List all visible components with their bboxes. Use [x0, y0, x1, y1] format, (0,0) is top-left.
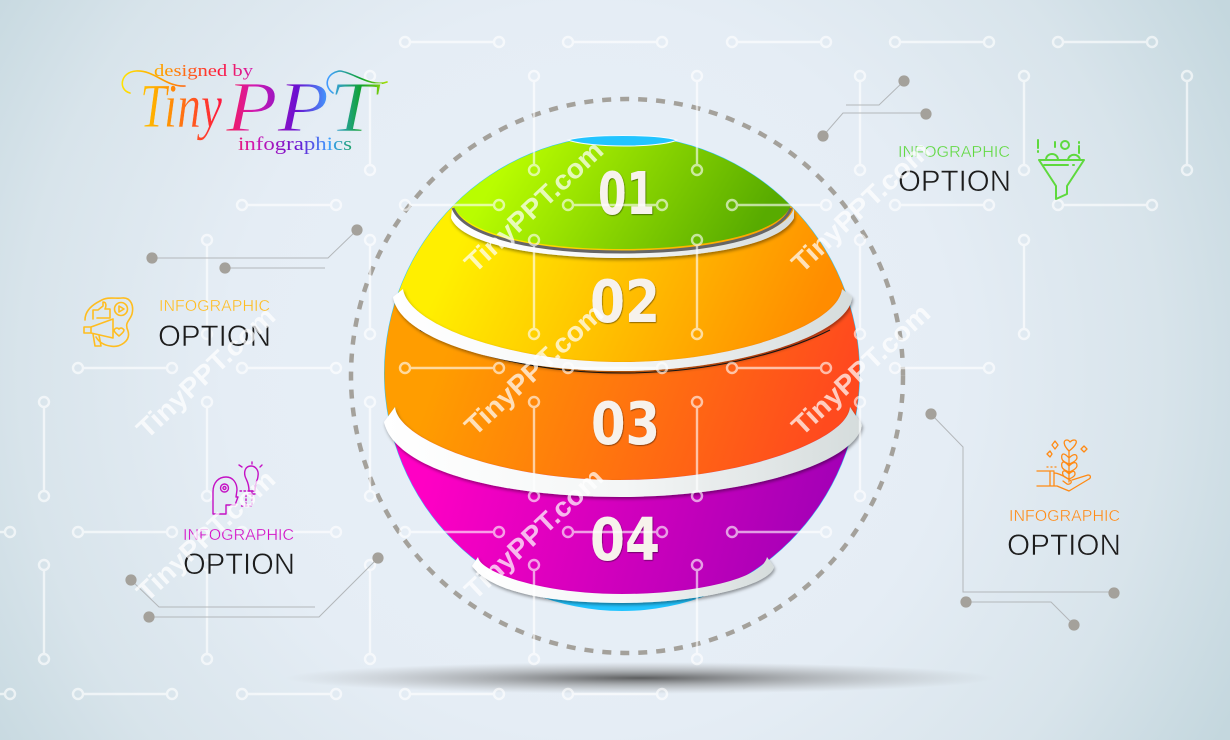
- watermarks: [131, 135, 936, 607]
- segment 03 orange band: [380, 280, 866, 480]
- icon: megaphone: [84, 298, 133, 346]
- number 03: 03: [591, 389, 660, 458]
- sphere cyan core: [384, 135, 860, 611]
- heading: INFOGRAPHIC: INFOGRAPHIC: [898, 144, 1010, 161]
- watermarks: TinyPPT.com: [459, 298, 609, 441]
- heading: INFOGRAPHIC: INFOGRAPHIC: [183, 527, 294, 544]
- ring under segment 03: [384, 407, 862, 497]
- logo PPT: PPT: [225, 67, 382, 147]
- number 01: 01: [598, 159, 655, 228]
- ring under segment 01: [451, 208, 794, 258]
- heading: OPTION: OPTION: [898, 165, 1011, 198]
- trace top left: [146, 224, 363, 274]
- gray circuit traces: [125, 75, 1120, 631]
- watermarks: TinyPPT.com: [459, 462, 609, 605]
- dark edge under ring 02: [420, 330, 830, 373]
- number 04: 04: [590, 505, 660, 574]
- heading: INFOGRAPHIC: INFOGRAPHIC: [1009, 508, 1120, 525]
- sphere: [380, 135, 866, 611]
- trace top right: [817, 75, 932, 142]
- logo: [122, 61, 387, 155]
- sphere ground shadow: [285, 662, 995, 694]
- dark edge under segment 01: [453, 208, 791, 252]
- icon: funnel: [1038, 140, 1084, 199]
- logo designed by: designed by: [154, 61, 254, 80]
- watermarks: TinyPPT.com: [786, 135, 936, 278]
- top cyan cap: [568, 136, 677, 146]
- segment 04 purple band: [380, 420, 866, 599]
- heading: OPTION: OPTION: [1007, 529, 1121, 562]
- watermarks: TinyPPT.com: [786, 298, 936, 441]
- number 02: 02: [590, 267, 660, 336]
- heading: INFOGRAPHIC: INFOGRAPHIC: [159, 298, 270, 315]
- logo swashes: [122, 71, 387, 93]
- heading: OPTION: OPTION: [158, 320, 271, 353]
- segment 02 yellow band: [390, 190, 856, 362]
- watermarks: TinyPPT.com: [131, 464, 281, 607]
- icon: hand with plant: [1037, 440, 1090, 491]
- logo infographics: infographics: [238, 134, 352, 155]
- ring under segment 04: [472, 557, 774, 603]
- heading: OPTION: OPTION: [183, 548, 295, 581]
- trace bottom right: [925, 408, 1120, 631]
- ring under segment 02: [393, 289, 852, 371]
- trace bottom left: [125, 552, 384, 623]
- segment 01 green cap: [440, 140, 800, 249]
- watermarks: TinyPPT.com: [459, 135, 609, 278]
- option label: left top: [84, 298, 271, 353]
- dashed orbit ring: [351, 99, 903, 653]
- watermarks: TinyPPT.com: [131, 301, 281, 444]
- option label: bottom left: [183, 462, 295, 581]
- logo Tiny: Tiny: [140, 73, 222, 141]
- option label: top right: [898, 140, 1084, 199]
- icon: head with gear and bulb: [213, 462, 262, 514]
- option label: bottom right: [1007, 440, 1121, 562]
